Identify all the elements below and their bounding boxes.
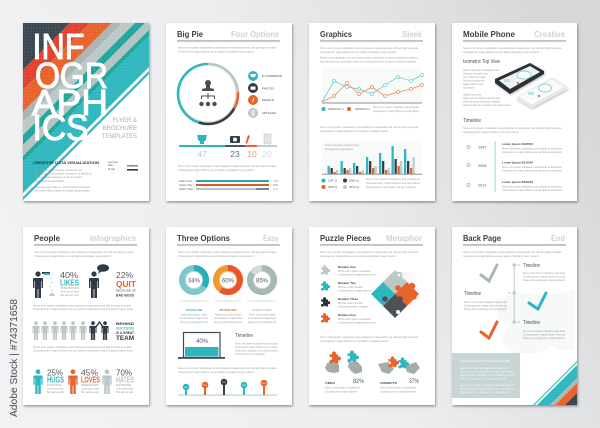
team slogan: TEAM — [116, 336, 134, 342]
item three: Number Three — [338, 297, 359, 301]
intro text: Nemo enim ipsam voluptatem quia voluptas sit aspernatur aut odit aut fugit sed quia — [463, 47, 562, 50]
line chart legend: PRODUCT 1 — [328, 107, 345, 111]
donut 85% — [250, 268, 274, 292]
isometric text: Nemo enim ipsam voluptatem quia — [463, 69, 500, 72]
option one: Neque porro quisquam est — [180, 321, 208, 324]
bar chart legend: 3RD Q — [328, 185, 337, 189]
isometric text: Neque porro quis — [463, 94, 482, 96]
phone white — [517, 78, 567, 108]
timeline text two: Nemo enim ipsam voluptatem quia volup — [464, 301, 508, 304]
stat: likes: THE BOSS — [60, 287, 80, 290]
stat: hugs: 25% — [47, 368, 63, 378]
cover title — [32, 26, 108, 148]
contact box: Consequuntur magni dolores eos qui ratione — [460, 370, 515, 374]
timeline text two: Neque porro quisquam est qui dolorem — [464, 308, 507, 311]
laptop text — [235, 333, 279, 356]
timeline item 1997 — [467, 142, 562, 154]
bar chart legend — [322, 178, 421, 189]
item three: Consequuntur magni — [338, 306, 369, 308]
intro text: Nemo enim ipsam voluptatem quia voluptas sit aspernatur aut odit aut fugit sed quia — [178, 46, 277, 50]
timeline text three: Nemo enim ipsam voluptatem quia volup — [523, 330, 566, 333]
option two — [214, 308, 242, 324]
line chart legend — [322, 106, 420, 113]
heading: Three Options — [177, 234, 231, 243]
panel: mobile phone — [452, 23, 577, 201]
stat: loves: LOVES — [81, 376, 100, 384]
option two: Neque porro quisquam est — [214, 321, 242, 324]
donut 34%: 34% — [188, 278, 201, 284]
intro text: Consequuntur magni dolores eos qui ratione voluptatem sequi nesciunt — [320, 51, 396, 54]
cover body text: Dolore magna aliqua ut enim ad minim — [34, 176, 82, 179]
mid text: Consequuntur magni dolores eos qui ratione voluptatem sequi — [320, 130, 388, 133]
intro text: Consequuntur magni dolores eos qui ratione voluptatem sequi nesciunt — [178, 50, 254, 54]
timeline text three: Consequuntur magni dolores eos qui — [523, 334, 565, 336]
legend: DESIGN — [262, 98, 274, 102]
timeline item 1997: Consequuntur magni dolores eos qui ratione voluptatem — [502, 151, 562, 154]
timeline text two: Timeline — [464, 291, 481, 297]
intro text: Nemo enim ipsam voluptatem quia voluptas sit aspernatur aut odit aut fugit sed quia — [463, 251, 562, 254]
puzzle pair left: Consequuntur magni dolores — [325, 390, 358, 394]
stock credit: Adobe Stock | #74371658 — [8, 299, 20, 417]
stat: hates: HATES — [116, 376, 134, 384]
intro text: Nemo enim ipsam voluptatem quia voluptas sit aspernatur aut odit aut fugit sed quia — [320, 251, 419, 254]
progress numbers: 20 — [262, 149, 272, 159]
intro text: Consequuntur magni dolores eos qui ratione voluptatem sequi nesciunt — [320, 255, 396, 258]
row 2 text: Consequuntur magni dolores eos qui ratione voluptatem sequi nesciunt neque porro — [33, 350, 134, 352]
heading — [463, 234, 566, 246]
legend: PHOTOS — [262, 86, 274, 90]
mid text: Nemo enim ipsam voluptatem quia voluptas sit aspernatur aut odit aut fugit sed quia — [320, 336, 419, 339]
heading: Sleek — [402, 30, 423, 39]
intro text: Nemo enim ipsam voluptatem quia voluptas sit aspernatur aut odit aut fugit sed quia — [320, 47, 419, 50]
timeline item 2012: 2012 — [478, 184, 486, 188]
mid text — [320, 126, 419, 133]
item three: Nemo enim ipsam — [338, 302, 363, 305]
cover body text — [34, 169, 92, 192]
isometric text: Aut odit aut fugit — [463, 76, 485, 79]
puzzle pair left: THINGS — [325, 381, 335, 385]
intro text: Consequuntur magni dolores eos qui ratione voluptatem sequi nesciunt — [35, 255, 111, 258]
cover title: ICS — [32, 107, 88, 148]
donut 34% — [182, 268, 206, 292]
heading: Four Options — [231, 30, 280, 39]
cover body text: Duis aute irure dolor in reprehenderit voluptate — [34, 186, 91, 189]
bar chart legend: Neque porro quisquam est qui dolorem — [366, 186, 416, 189]
intro text — [320, 251, 419, 258]
row 2 text — [33, 346, 134, 352]
cover mini legend: Lorem Ipsum — [108, 160, 118, 164]
timeline text one: Neque porro quisquam est qui dolorem — [523, 279, 565, 282]
heading: Creative — [534, 30, 566, 39]
intro text: Consequuntur magni dolores eos qui ratione voluptatem sequi nesciunt — [178, 255, 254, 258]
stat: quit: QUIT — [116, 280, 136, 289]
option bars: 51% — [273, 187, 279, 191]
intro text — [178, 251, 277, 258]
pin timeline — [178, 379, 277, 396]
puzzle pair right: 37% — [409, 379, 420, 385]
stat: hates: BAD WEATHER — [116, 384, 131, 387]
intro text — [463, 47, 562, 54]
stat: loves — [68, 368, 100, 394]
stat: hates: Sit amet elit — [116, 391, 133, 394]
cover body text: Velit esse cillum dolore eu fugiat nulla pariatur — [34, 190, 90, 192]
panel: back page — [452, 227, 577, 405]
lower text: Consequuntur magni dolores eos qui ratione voluptatem sequi nesciunt — [178, 371, 254, 374]
bar chart legend: Consequuntur magni dolores eos qui ratione — [366, 182, 421, 185]
laptop text: Timeline — [235, 333, 253, 339]
stat: loves: WEEKENDS — [81, 384, 100, 387]
phone dark — [495, 63, 544, 94]
subheading: isometric: Isometric Top View — [463, 59, 500, 65]
laptop text: Neque porro quisquam est qui dolorem ipsum — [235, 350, 278, 352]
timeline item 2012: Nemo enim ipsam voluptatem quia voluptas sit aspernatur — [502, 186, 562, 188]
laptop text: Nemo enim ipsam voluptatem quia voluptas — [235, 342, 279, 346]
subheading: timeline: Timeline — [463, 118, 481, 124]
cover title: INF — [32, 26, 84, 67]
cover body text: Lorem ipsum dolor sit amet consectetur elit — [34, 169, 82, 172]
cover title: APH — [32, 82, 108, 123]
puzzle pair right: CONNECT% — [380, 381, 398, 385]
heading: Mobile Phone — [463, 30, 516, 39]
option bars: Option One — [179, 179, 193, 183]
timeline item 2008: 2008 — [478, 164, 486, 168]
heading: Infographics — [90, 234, 137, 243]
heading — [320, 234, 423, 246]
stat: hugs — [33, 368, 64, 394]
intro text — [463, 251, 562, 258]
timeline item 1997: Nemo enim ipsam voluptatem quia voluptas sit aspernatur — [502, 148, 562, 150]
timeline text three — [523, 320, 566, 340]
vertical timeline — [508, 263, 520, 324]
donut shadows — [179, 300, 277, 302]
legend: E-COMMERCE — [262, 74, 282, 78]
item two — [321, 281, 373, 292]
item one: Consequuntur magni dolores eos — [338, 274, 377, 276]
timeline text one — [523, 263, 566, 282]
pin timeline: 70% — [222, 382, 226, 384]
option bars: Option Two — [179, 183, 193, 187]
contact box — [452, 353, 520, 398]
item one: Nemo enim ipsam voluptatem — [338, 270, 371, 273]
option two: Consequuntur magni dolor — [214, 317, 242, 320]
option three: Nemo enim ipsam volupt — [249, 314, 275, 316]
option two: OPTION TWO — [219, 308, 237, 312]
stat: hugs: Lorem ipsum dolor — [47, 388, 64, 390]
row 1 text: Nemo enim ipsam voluptatem quia voluptas sit aspernatur aut odit aut fugit sed quia — [33, 304, 132, 308]
row 1 text: Consequuntur magni dolores eos qui ratione voluptatem sequi nesciunt neque porro — [33, 308, 134, 311]
body text — [178, 165, 277, 172]
laptop: 40% — [196, 339, 209, 345]
progress numbers: 23 — [230, 149, 240, 159]
heading — [463, 30, 566, 42]
donut ring — [178, 64, 238, 124]
panel: cover — [23, 23, 149, 201]
timeline item 2012: Consequuntur magni dolores eos qui ratione voluptatem — [502, 189, 562, 192]
intro text: Neque porro quisquam est qui dolorem ipsum quia dolor sit amet consectetur adipisci — [320, 56, 419, 60]
contact box: Velit sed quia non numquam eius modi — [460, 378, 507, 380]
stat: loves: 45% — [81, 368, 98, 378]
timeline text one: Timeline — [523, 263, 540, 269]
cover subtitle: TEMPLATES — [102, 134, 137, 140]
bar chart legend: 2ND Q — [349, 178, 359, 182]
line chart legend: PRODUCT 2 — [355, 107, 371, 111]
panel: puzzle pieces — [309, 227, 435, 405]
timeline item 1997: Lorem Ipsum 1/3/2004 — [502, 142, 534, 146]
item two: Number Two — [338, 281, 356, 285]
bar chart legend: 4TH Q — [349, 185, 359, 189]
stat: hates — [102, 368, 134, 394]
lower text: Nemo enim ipsam voluptatem quia voluptas sit aspernatur aut odit aut fugit sed quia — [178, 367, 277, 370]
stat: likes: LIKES — [60, 278, 80, 288]
legend — [248, 71, 282, 118]
progress bar — [179, 145, 277, 147]
intro text: Nemo enim ipsam voluptatem quia voluptas sit aspernatur aut odit aut fugit sed quia — [178, 251, 277, 254]
item four: Consequuntur magni dolores eos — [338, 322, 377, 324]
item four: Nemo enim ipsam voluptatem — [338, 318, 371, 321]
heading — [177, 30, 280, 42]
corner stripes — [533, 361, 577, 405]
option bars: 72% — [273, 179, 279, 183]
cover title: OGR — [35, 55, 108, 96]
mid text — [320, 336, 419, 343]
team slogan: BEHIND — [116, 322, 134, 326]
panel: graphics — [309, 23, 435, 201]
option three: OPTION THREE — [252, 308, 272, 312]
item two: Nemo enim ipsam — [338, 286, 363, 289]
heading: Puzzle Pieces — [320, 234, 372, 243]
team slogan: SUCCESS — [116, 326, 134, 330]
option bars: 68% — [273, 183, 279, 187]
mid text: Nemo enim ipsam voluptatem quia voluptas sit aspernatur aut odit aut fugit sed quia — [320, 126, 419, 129]
stat: likes: Lorem ipsum dolor — [60, 290, 79, 294]
intro text: Nemo enim ipsam voluptatem quia voluptas sit aspernatur aut odit aut fugit sed quia — [35, 251, 134, 254]
heading — [177, 234, 280, 246]
timeline intro — [463, 127, 562, 134]
item one — [321, 265, 377, 276]
line chart legend: Nemo enim ipsam voluptatem quia voluptas — [373, 106, 420, 109]
stat: hugs: HUGS — [47, 376, 64, 384]
progress numbers: 47 — [197, 149, 207, 159]
bar chart legend: 1ST Q — [328, 178, 337, 182]
heading — [320, 30, 423, 42]
bar chart: Consequuntur magni dolores — [325, 148, 354, 151]
stat: quit: BECAUSE OF — [116, 288, 136, 292]
intro text: Consequuntur magni dolores eos qui ratione voluptatem sequi nesciunt — [463, 51, 539, 54]
check gray — [481, 265, 497, 281]
cover subtitle: FLYER & — [112, 118, 137, 124]
team row — [32, 321, 109, 340]
timeline item 2008: Lorem Ipsum 3/1/2004 — [502, 160, 534, 164]
item three — [321, 297, 369, 308]
puzzle pair right — [378, 356, 420, 394]
check teal — [529, 293, 546, 309]
stat: loves: Sit amet elit — [81, 391, 99, 394]
legend: ARTICLES — [262, 111, 276, 115]
timeline text three: Timeline — [523, 320, 540, 326]
cover subtitle — [102, 118, 137, 140]
stat: hugs: Sit amet elit — [47, 391, 64, 394]
contact box: CREATIVE DATA VISUALIZATION — [460, 359, 510, 363]
option bars — [179, 179, 279, 191]
item four: Number Four — [338, 313, 356, 317]
timeline item 2008: Consequuntur magni dolores eos qui ratione voluptatem — [502, 170, 562, 172]
option one — [180, 308, 208, 324]
stat: likes: 40% — [60, 270, 78, 280]
item four — [321, 313, 377, 324]
contact box: Neque porro quisquam est qui dolorem ipsum — [460, 374, 514, 377]
lower text — [178, 367, 277, 374]
row 2 text: Nemo enim ipsam voluptatem quia voluptas sit aspernatur aut odit aut fugit sed quia — [33, 346, 132, 349]
option three: Consequuntur magni dolor — [248, 317, 276, 320]
timeline text one: Nemo enim ipsam voluptatem quia volup — [523, 272, 566, 275]
isometric text: Voluptas sit aspernatur — [463, 72, 488, 76]
cover body text: Quis nostrud exercitation — [34, 180, 65, 183]
puzzle pair left — [325, 350, 365, 394]
timeline intro: Consequuntur magni dolores eos qui ratione — [463, 131, 520, 134]
timeline text two: Consequuntur magni dolores eos qui — [464, 304, 508, 308]
icon: org chart — [199, 80, 217, 106]
timeline item 2012: Lorem Ipsum 3/6/2004 — [502, 180, 534, 184]
option three — [248, 308, 276, 324]
body text: Consequuntur magni dolores eos qui ratione voluptatem sequi nesciunt — [178, 169, 254, 172]
mid text: Consequuntur magni dolores eos qui ratione voluptatem sequi — [320, 340, 388, 343]
cover mini legend: Dolor — [108, 163, 113, 167]
body text: Nemo enim ipsam voluptatem quia voluptas sit aspernatur aut odit aut fugit sed quia — [178, 165, 277, 168]
isometric text: Quam est qui dolorem ipsum quia — [463, 97, 501, 100]
contact box: Nemo enim ipsam voluptatem quia voluptas sit — [460, 367, 508, 370]
bar chart: Nemo enim ipsam voluptatem quia — [325, 144, 360, 147]
progress icons — [197, 134, 271, 144]
stat: quit — [89, 264, 136, 298]
isometric text: Qui ratione — [463, 86, 476, 90]
laptop text: Velit sed quia non numquam — [235, 353, 265, 356]
timeline item 1997: 1997 — [478, 146, 486, 150]
timeline item 2008: Nemo enim ipsam voluptatem quia voluptas sit aspernatur — [502, 166, 562, 169]
cover diagonal stripes — [23, 23, 149, 200]
item one: Number One — [338, 265, 357, 269]
option three: Neque porro quisquam est — [248, 321, 276, 324]
stat: likes: Sit amet elit — [60, 294, 79, 297]
laptop — [178, 332, 225, 359]
heading: Back Page — [463, 234, 502, 243]
donut 85%: 85% — [256, 278, 269, 284]
isometric text — [463, 69, 512, 107]
isometric text: Sed quia consequuntur — [463, 80, 485, 82]
puzzle pair right: Consequuntur magni dolores — [380, 390, 417, 394]
isometric text: Dolor sit amet consectetur adipisci — [463, 100, 500, 104]
donut 60%: 60% — [222, 278, 235, 284]
intro text — [320, 47, 419, 64]
heading: Metaphor — [386, 234, 422, 243]
option two: Nemo enim ipsam volupt — [215, 314, 241, 316]
timeline item 2012 — [467, 180, 562, 192]
cover tagline: CREATIVE DATA VISUALIZATION — [33, 161, 99, 165]
pin timeline: 10% — [184, 387, 188, 389]
timeline item 2008 — [467, 160, 562, 172]
heading: Graphics — [320, 30, 353, 39]
stat: hugs: EVERYDAY — [47, 384, 62, 387]
pin timeline: 50% — [262, 383, 266, 385]
cover mini legend: Sit Amet — [108, 167, 115, 171]
bar chart — [322, 141, 422, 175]
bar chart legend: Nemo enim ipsam voluptatem quia voluptas sit — [366, 178, 420, 181]
cover mini legend — [108, 160, 138, 171]
stat: loves: Lorem ipsum dolor — [81, 388, 99, 390]
cover subtitle: BROCHURE — [103, 126, 137, 132]
laptop text: Consequuntur magni dolores eos qui ratione — [235, 346, 279, 349]
panel: three options — [166, 227, 292, 405]
stat: quit: BAD BOSS — [116, 292, 134, 298]
check orange — [481, 322, 497, 338]
pin timeline: 20% — [203, 385, 207, 387]
cover body text: Sed do eiusmod tempor incididunt ut labore et — [34, 172, 92, 176]
donut 60% — [216, 268, 240, 292]
option one: Consequuntur magni dolor — [180, 317, 208, 320]
stat: quit: 22% — [116, 270, 133, 280]
contact box: Nemo enim ipsam voluptatem quia voluptas sit — [460, 384, 514, 387]
intro text: Velit sed quia non numquam eius modi tempora incidunt ut labore et dolore magnam — [320, 60, 416, 64]
isometric text: Magni dolores eos — [463, 83, 484, 86]
intro text — [178, 46, 277, 54]
timeline text two — [464, 291, 508, 311]
pin timeline: 30% — [242, 385, 246, 387]
progress numbers: 10 — [247, 149, 257, 159]
line chart — [322, 68, 424, 104]
puzzle diamond — [371, 270, 427, 318]
world map — [495, 290, 575, 353]
team slogan: IS A GREAT — [116, 331, 135, 335]
contact box: Consequuntur magni dolores eos qui ratione — [460, 388, 515, 390]
panel: people — [23, 227, 149, 405]
line chart legend: Consequuntur magni dolores eos qui ratione — [373, 110, 420, 113]
option one: Nemo enim ipsam volupt — [181, 314, 207, 316]
puzzle pair left: Nemo enim ipsam voluptatem — [325, 386, 360, 390]
intro text: Consequuntur magni dolores eos qui ratione voluptatem sequi nesciunt — [463, 255, 539, 258]
stat: hates: Lorem ipsum dolor — [116, 388, 133, 390]
heading: Big Pie — [177, 30, 204, 39]
progress numbers — [197, 149, 272, 159]
team slogan — [116, 322, 135, 342]
option bars: Option Three — [179, 187, 194, 191]
timeline intro: Nemo enim ipsam voluptatem quia voluptas sit aspernatur aut odit aut fugit sed quia — [463, 127, 562, 130]
timeline line — [494, 141, 496, 192]
option one: OPTION ONE — [186, 308, 203, 312]
timeline text three: Neque porro quisquam est qui dolorem — [523, 337, 565, 340]
contact box: Neque porro quisquam est qui dolorem — [460, 391, 510, 394]
heading: People — [34, 234, 61, 243]
panel: big pie — [166, 23, 292, 201]
heading — [34, 234, 137, 246]
item two: Consequuntur magni dolores — [338, 290, 373, 292]
stat: hates: 70% — [116, 368, 132, 378]
row 1 text — [33, 304, 134, 311]
isometric text: Velit sed quia non numquam eius modi tempora — [463, 104, 512, 107]
heading: Easy — [263, 234, 279, 243]
heading: End — [551, 234, 565, 243]
intro text — [35, 251, 134, 258]
puzzle pair right: Nemo enim ipsam voluptatem — [380, 386, 416, 390]
puzzle pair left: 82% — [353, 379, 365, 385]
timeline text one: Consequuntur magni dolores eos qui — [523, 276, 565, 278]
stat: likes — [33, 270, 80, 298]
